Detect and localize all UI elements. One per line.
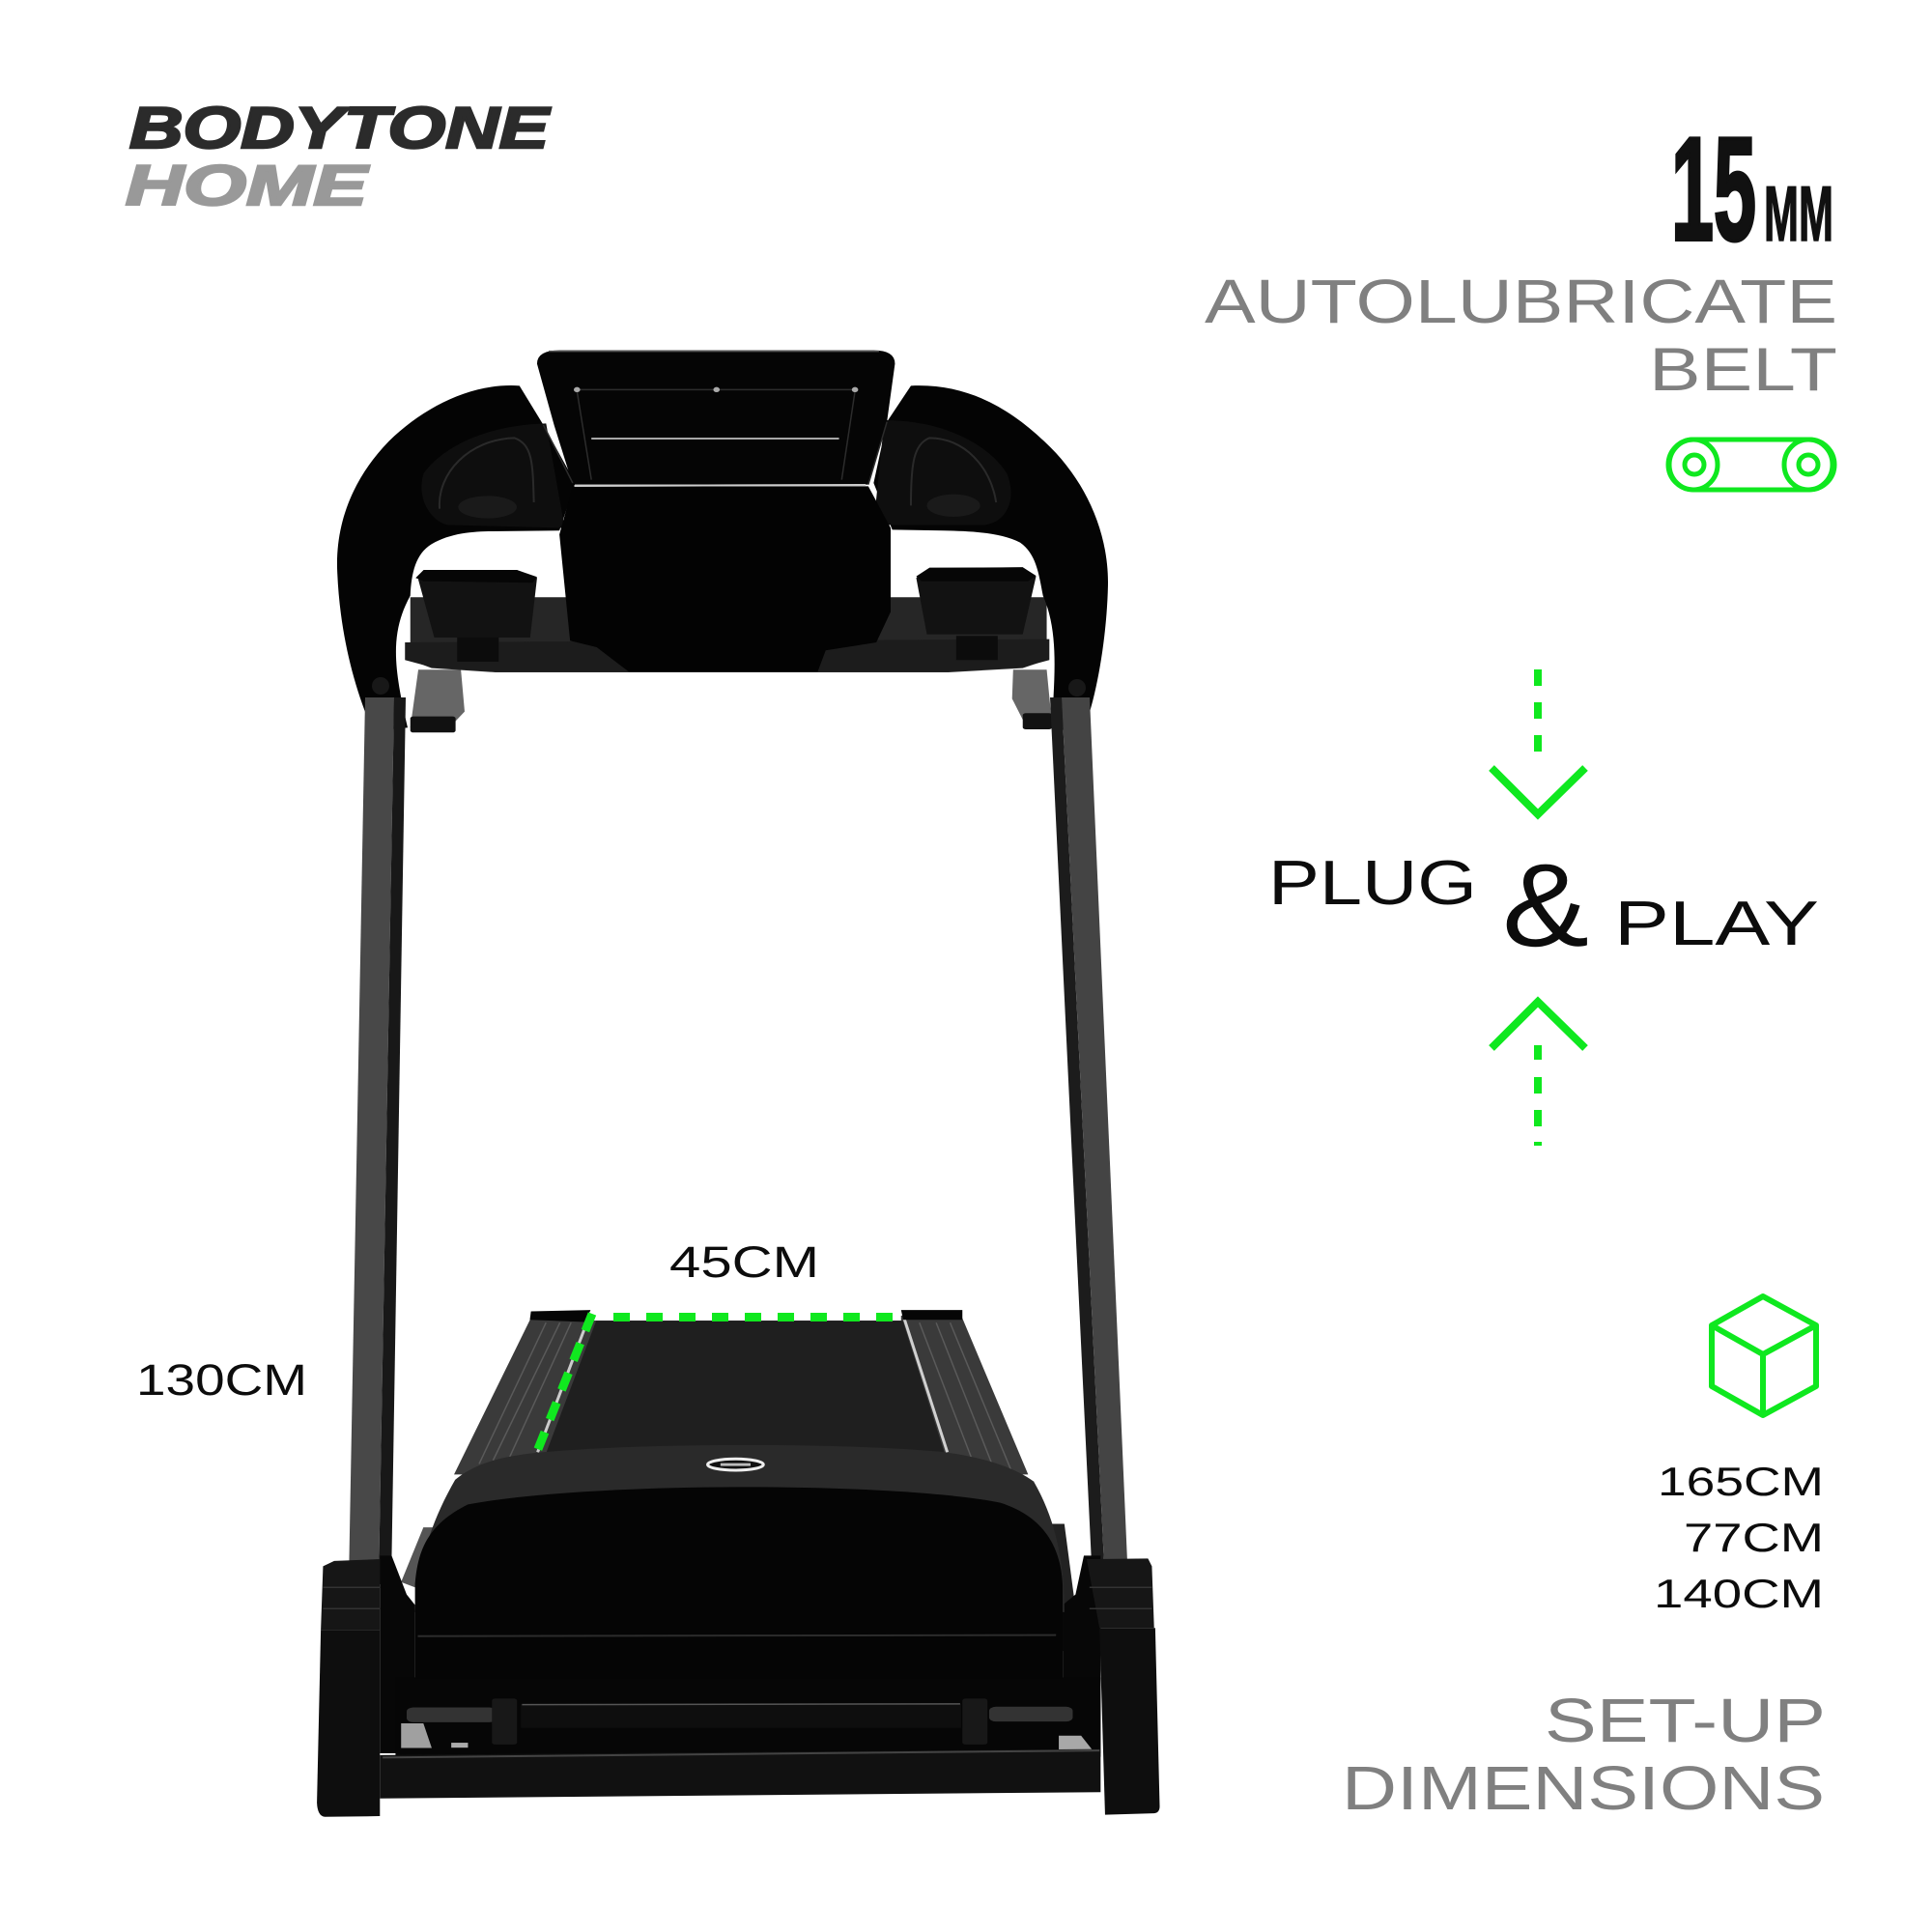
right foot	[1099, 1628, 1160, 1815]
text: dimension values	[1654, 1459, 1824, 1616]
gray bracket right	[1012, 669, 1052, 724]
post right face	[379, 697, 406, 1584]
running belt	[546, 1321, 945, 1453]
side bracket left	[380, 1555, 415, 1753]
line 1: SET-UP	[1545, 1686, 1826, 1755]
handlebar inset left	[421, 423, 565, 528]
label: 130CM: 130CM	[136, 1355, 307, 1405]
side plate right	[1045, 1524, 1081, 1651]
hub left	[372, 677, 389, 695]
deck end cap right	[901, 1310, 962, 1320]
unit MM: MM	[1764, 171, 1833, 258]
roller axle left	[407, 1708, 496, 1722]
badge mark	[721, 1463, 751, 1466]
speaker ring left	[458, 496, 517, 519]
deck body	[454, 1316, 1028, 1474]
roller block right	[962, 1698, 987, 1745]
dashed shaft	[1534, 669, 1542, 752]
hub right	[1068, 679, 1086, 696]
heading: 15 MM	[1671, 107, 1833, 271]
right handlebar	[873, 385, 1108, 736]
left collar	[321, 1559, 380, 1630]
side plate left	[401, 1527, 437, 1587]
bottom frame	[380, 1749, 1100, 1799]
icon: cube	[1712, 1296, 1816, 1415]
length: 165CM	[1658, 1459, 1824, 1504]
icon: belt rollers	[1668, 440, 1834, 490]
right collar	[1087, 1558, 1154, 1628]
cup holder left rim	[415, 570, 537, 582]
handlebar grip edge right	[911, 438, 996, 505]
arrow: up	[1492, 1002, 1585, 1146]
treadmill photo illustration	[317, 351, 1160, 1817]
left hub	[1685, 455, 1704, 474]
treadmill deck and base	[317, 1305, 1160, 1817]
handlebar inset right	[873, 420, 1011, 525]
gray bracket left	[411, 669, 465, 727]
green dashed belt edge	[536, 1314, 592, 1454]
logo: Bodytone Home	[126, 96, 552, 217]
badge ring	[708, 1459, 763, 1470]
logo word: BODYTONE: BODYTONE	[129, 96, 552, 160]
belt edge right	[904, 1320, 948, 1452]
gap highlight left	[401, 1723, 432, 1748]
console highlight top	[549, 351, 879, 353]
roller highlight	[522, 1703, 960, 1706]
clamp right	[956, 636, 998, 660]
motor cover seam	[418, 1635, 1056, 1636]
line 1: AUTOLUBRICATE	[1205, 267, 1837, 336]
roller block left	[492, 1698, 517, 1745]
word PLAY: PLAY	[1614, 888, 1819, 958]
bottom frame highlight	[383, 1750, 1099, 1757]
console highlight lower	[575, 484, 866, 487]
roller axle right	[989, 1707, 1072, 1721]
chevron	[1492, 768, 1585, 814]
crossbar lower band	[405, 639, 1049, 671]
console highlight mid	[591, 438, 839, 440]
side bracket right	[1063, 1555, 1100, 1753]
cup holder right rim	[916, 567, 1037, 582]
post right face	[1062, 697, 1128, 1584]
handlebar grip edge left	[440, 438, 534, 509]
left foot	[317, 1630, 380, 1817]
foot right	[1023, 713, 1052, 729]
clamp left	[457, 638, 498, 662]
width: 77CM	[1684, 1515, 1824, 1560]
belt edge left	[538, 1324, 586, 1452]
gap highlight right	[1059, 1736, 1093, 1749]
number 15: 15	[1671, 107, 1756, 271]
cup holder left	[418, 570, 537, 638]
belt outline	[1668, 440, 1834, 490]
under-cover mechanism area	[395, 1677, 1100, 1757]
ampersand: &	[1502, 839, 1589, 971]
brand oval badge	[708, 1459, 763, 1470]
text: plug and play	[1268, 839, 1819, 971]
white gap at deck top	[590, 1305, 901, 1321]
post left face	[1050, 697, 1105, 1584]
green dashes: belt width	[613, 1313, 893, 1321]
height: 140CM	[1654, 1571, 1824, 1616]
rear roller bar	[521, 1704, 961, 1728]
right upright post	[1050, 697, 1128, 1584]
line 2: DIMENSIONS	[1342, 1753, 1825, 1823]
console body lower	[559, 486, 891, 671]
word PLUG: PLUG	[1268, 847, 1477, 918]
foot left	[411, 717, 456, 732]
arrow: down	[1492, 669, 1585, 814]
speaker ring right	[927, 495, 980, 517]
console screws	[574, 387, 858, 392]
cup holder right	[916, 567, 1037, 635]
console edges	[544, 389, 887, 485]
line 2: BELT	[1649, 336, 1837, 404]
left roller	[1669, 440, 1718, 490]
gap highlight left small	[451, 1743, 468, 1747]
treadmill console and handlebars	[337, 351, 1108, 736]
collar ribs	[323, 1587, 1151, 1608]
console top panel	[537, 351, 895, 485]
rail lines	[479, 1322, 1011, 1471]
label: 45CM: 45CM	[669, 1237, 819, 1287]
text: autolubricate belt	[1205, 267, 1837, 404]
motor cover band	[415, 1445, 1065, 1612]
crossbar	[411, 597, 1047, 672]
text: set-up dimensions	[1342, 1686, 1826, 1823]
post left face	[349, 697, 394, 1584]
right hub	[1799, 455, 1818, 474]
right roller	[1784, 440, 1833, 490]
left upright post	[349, 697, 406, 1584]
left handlebar	[337, 385, 576, 731]
dashed shaft	[1534, 1045, 1542, 1146]
chevron	[1492, 1002, 1585, 1048]
logo word: HOME: HOME	[126, 155, 370, 217]
deck end cap left	[529, 1310, 590, 1322]
motor cover face	[415, 1487, 1063, 1679]
